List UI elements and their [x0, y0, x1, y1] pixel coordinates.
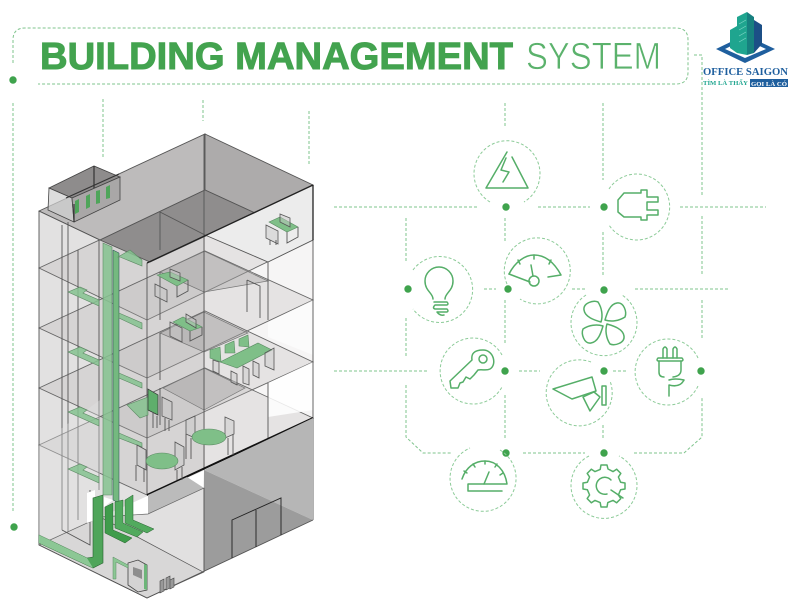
right duct branches: [118, 250, 142, 447]
icon: speed gauge: [504, 238, 570, 304]
icon: ventilation fan: [571, 295, 637, 356]
title: BUILDING MANAGEMENT: [40, 36, 513, 78]
logo: Office Saigon: [703, 12, 788, 88]
left duct branches: [68, 287, 99, 483]
icon: power plug: [609, 174, 670, 240]
control cabinet: [113, 557, 174, 593]
logo: Office Saigon: OFFICE SAIGON: [703, 66, 788, 78]
connector dots: [9, 76, 705, 531]
icon: access key: [440, 338, 502, 404]
structural lines: [39, 134, 313, 545]
logo: Office Saigon: GỌI LÀ CÓ: [751, 80, 787, 88]
icon: security camera: [546, 360, 612, 426]
back walls: [39, 134, 313, 545]
desk third floor: [155, 269, 188, 302]
icon: eco plug: [635, 339, 698, 405]
logo: Office Saigon: TÌM LÀ THẤY: [703, 79, 748, 87]
rooftop unit: [48, 166, 120, 222]
desk second floor: [170, 314, 202, 342]
desk top floor: [266, 214, 298, 245]
green chairs and desk: [127, 389, 172, 431]
title frame: [13, 28, 688, 84]
roof and ceiling: [39, 134, 313, 262]
icon: gear and wrench: [571, 456, 637, 518]
isometric building: [39, 134, 313, 598]
long meeting table: [210, 335, 274, 385]
dashed connector network: [13, 55, 766, 513]
icon: dashboard meter: [450, 448, 516, 511]
green riser ducts: [103, 243, 119, 503]
ground floor room: [39, 400, 313, 598]
round table upper: [186, 416, 234, 459]
title: SYSTEM: [526, 36, 661, 78]
icon: high voltage warning: [474, 141, 540, 202]
round table lower: [136, 442, 184, 482]
ground duct: [39, 490, 154, 568]
double doors: [232, 498, 281, 558]
icon: light bulb: [413, 257, 473, 323]
floor slabs: [39, 191, 313, 495]
